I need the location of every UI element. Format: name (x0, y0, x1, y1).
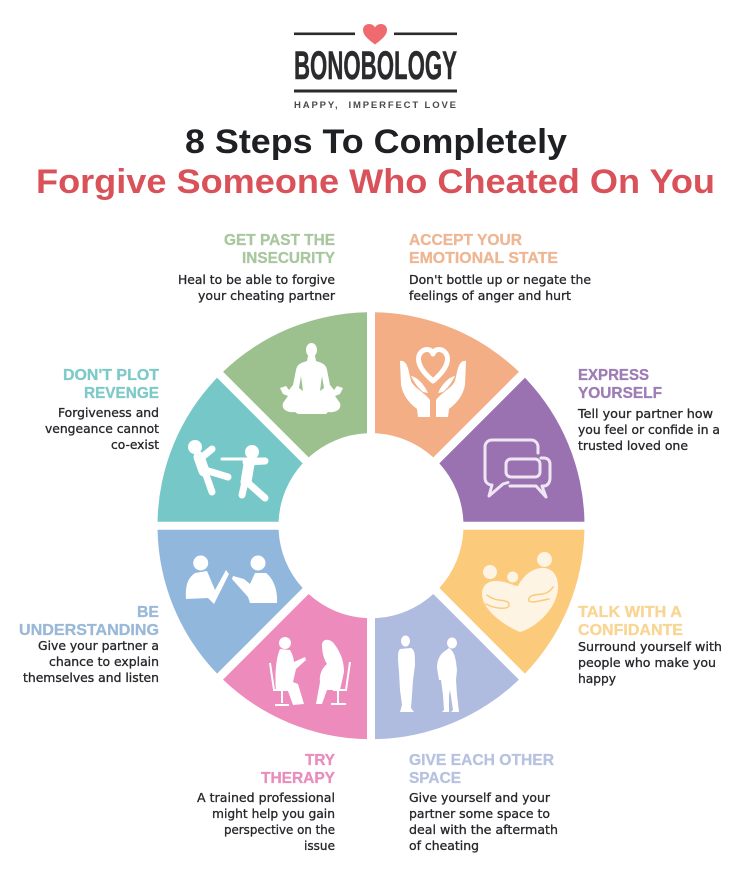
description: A trained professional (197, 791, 335, 805)
icon: meditating person (280, 343, 343, 414)
description: vengeance cannot (45, 422, 159, 436)
wedge (223, 594, 367, 739)
heading: DON'T PLOT (63, 367, 160, 384)
wedge (158, 530, 303, 674)
description (409, 791, 558, 853)
description: Heal to be able to forgive (178, 273, 335, 287)
description: Give yourself and your (409, 791, 550, 805)
wedge (375, 312, 519, 457)
heading: EXPRESS (578, 367, 649, 384)
icon: hands holding heart (400, 350, 466, 417)
icon: two people talking (186, 556, 277, 604)
description: trusted loved one (578, 439, 688, 453)
panel: don't plot revenge (45, 367, 303, 522)
description (409, 273, 591, 303)
description: might help you gain (212, 807, 335, 821)
wedge (439, 530, 584, 674)
icon: therapy session (270, 637, 350, 705)
heading: BE (137, 604, 159, 621)
heading: INSECURITY (242, 250, 336, 267)
icon: two people fighting (188, 440, 265, 498)
title line 1: 8 Steps To Completely (185, 123, 567, 161)
heading (261, 752, 336, 787)
panel: accept your emotional state (375, 232, 591, 457)
heading (19, 604, 159, 639)
panel: give each other space (375, 594, 558, 853)
description (197, 791, 335, 853)
heading: TRY (305, 752, 336, 769)
heading: CONFIDANTE (578, 622, 683, 639)
description: perspective on the (224, 823, 335, 837)
description: your cheating partner (198, 289, 335, 303)
heading: EMOTIONAL STATE (409, 250, 558, 267)
heading (578, 367, 662, 402)
heading: UNDERSTANDING (19, 622, 159, 639)
title line 2: Forgive Someone Who Cheated On You (36, 163, 715, 201)
heading (224, 232, 336, 267)
panel: be understanding (19, 530, 303, 685)
description (178, 273, 335, 303)
description: chance to explain (49, 655, 159, 669)
description: Surround yourself with (578, 640, 722, 654)
description: themselves and listen (23, 671, 159, 685)
description: Tell your partner how (577, 407, 713, 421)
heading (409, 232, 558, 267)
description: co-exist (111, 438, 159, 452)
logo wordmark: BONOBOLOGY (294, 44, 457, 88)
heading: GET PAST THE (224, 232, 335, 249)
heading: THERAPY (261, 770, 336, 787)
description: of cheating (409, 839, 479, 853)
wedge (223, 312, 367, 457)
wedge (158, 378, 303, 522)
description: partner some space to (409, 807, 550, 821)
heading: ACCEPT YOUR (409, 232, 522, 249)
panel: try therapy (197, 594, 367, 853)
logo tagline: HAPPY, IMPERFECT LOVE (294, 100, 456, 111)
description: you feel or confide in a (578, 423, 720, 437)
icon: embracing heart (482, 552, 558, 632)
wedge (375, 594, 519, 739)
description: Forgiveness and (58, 406, 159, 420)
description (577, 407, 720, 453)
description: deal with the aftermath (409, 823, 558, 837)
panel: talk with a confidante (439, 530, 722, 686)
heading: SPACE (409, 770, 461, 787)
description: feelings of anger and hurt (409, 289, 571, 303)
description (23, 639, 159, 685)
logo: Bonobology (294, 24, 457, 111)
description: Give your partner a (38, 639, 159, 653)
description: issue (304, 839, 335, 853)
description: happy (578, 672, 616, 686)
heading (578, 604, 683, 639)
panel: get past the insecurity (178, 232, 367, 457)
wedge (439, 378, 584, 522)
heading: TALK WITH A (578, 604, 682, 621)
description: people who make you (578, 656, 716, 670)
description: Don't bottle up or negate the (409, 273, 591, 287)
description (578, 640, 722, 686)
description (45, 406, 159, 452)
heading: GIVE EACH OTHER (409, 752, 554, 769)
heading (409, 752, 554, 787)
title (36, 123, 715, 201)
panel: express yourself (439, 367, 720, 522)
icon: chat bubbles (485, 440, 550, 497)
heading: REVENGE (84, 385, 159, 402)
heading (63, 367, 160, 402)
icon: two standing people (398, 636, 459, 712)
icon: heart (363, 24, 387, 44)
heading: YOURSELF (578, 385, 662, 402)
